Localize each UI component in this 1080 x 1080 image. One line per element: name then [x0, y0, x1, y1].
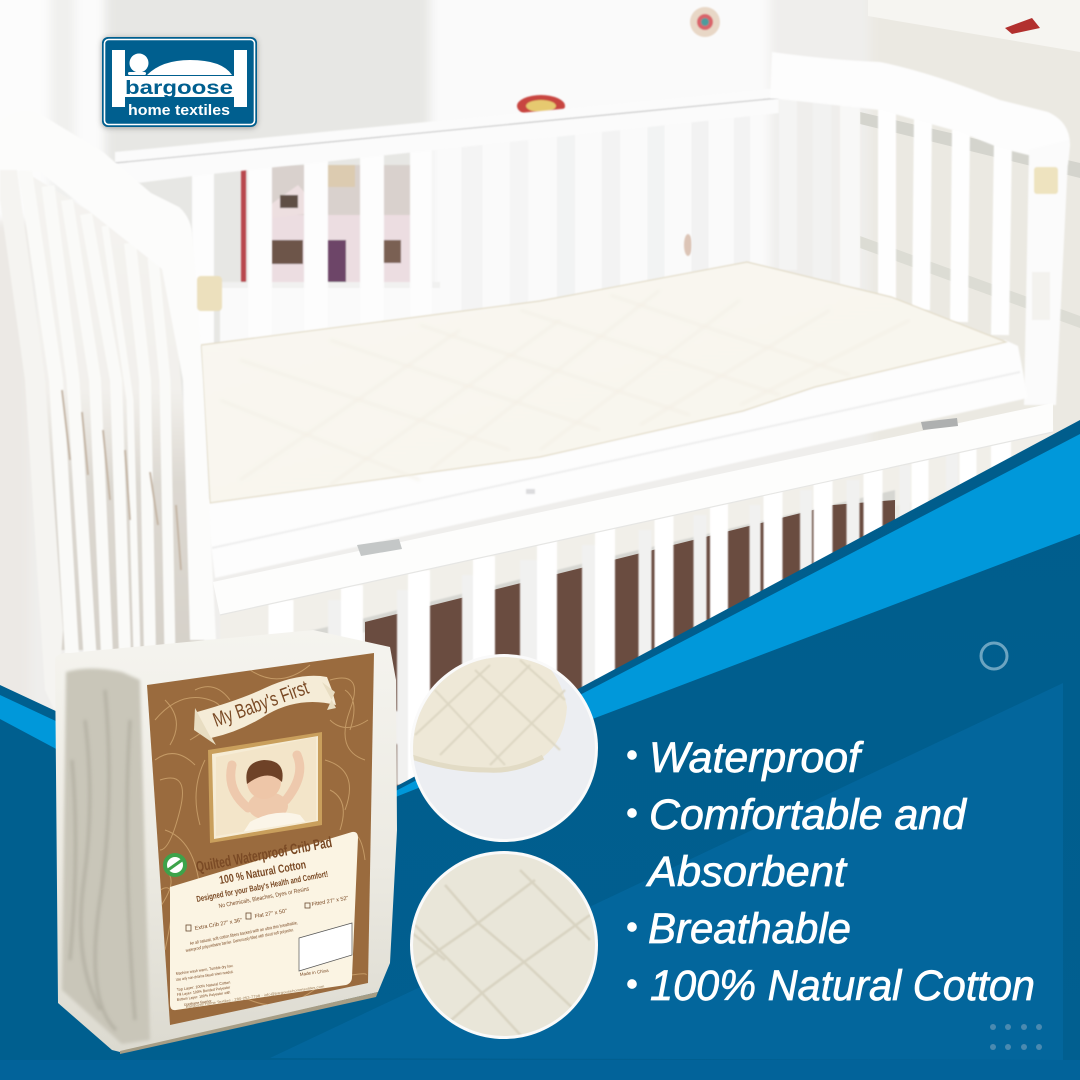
right crib head panel: [770, 52, 1070, 405]
banner: [194, 676, 336, 745]
under-rail back panel: [220, 425, 1053, 668]
information card: [170, 832, 358, 1010]
logo: bargoose home textiles: home textiles: [128, 102, 230, 119]
card text: Fitted 27" x 52": [311, 896, 349, 908]
banner title: My Baby's First: [210, 677, 312, 732]
card text: No Chemicals, Bleaches, Dyes or Resins: [218, 887, 310, 910]
icon: red toy at top right of the crib: [1005, 18, 1040, 34]
card text: Top Layer: 100% Natural Cotton: [177, 981, 231, 992]
blue background shapes: [0, 420, 1080, 1080]
zipper pull: [526, 489, 535, 494]
bullet: Waterproof: Waterproof: [649, 734, 864, 782]
back crib rail and slats: [115, 88, 779, 346]
cabinet strips on the right: [860, 0, 1080, 328]
card text: Machine wash warm. Tumble dry low.: [175, 963, 234, 976]
card text: Extra Crib 27" x 36": [194, 918, 243, 932]
product package: [55, 630, 397, 1054]
crib label sticker: [1032, 272, 1050, 320]
dollhouse behind the crib: [220, 165, 440, 345]
card text: Urethane Barrier: [184, 999, 213, 1007]
wall flower decorations: [517, 7, 720, 256]
quilted pad: [201, 262, 1006, 503]
logo: bargoose home textiles: [102, 37, 257, 128]
card text: Bottom Layer: 100% Polyester with: [177, 991, 231, 1002]
card text: An all natural, soft cotton fibers backed with an ultra thin breathable,: [189, 920, 298, 946]
front crib rail with hinges: [213, 403, 1053, 615]
left crib foot panel: [0, 111, 222, 716]
card text: Quilted Waterproof Crib Pad: [195, 834, 333, 876]
front crib slats: [281, 436, 1001, 785]
green cotton seal: [163, 853, 187, 877]
bullet: Comfortable and Absorbent: Comfortable and: [649, 791, 968, 839]
plastic wrap: [55, 630, 397, 1052]
hinge left: [357, 539, 402, 556]
card text: waterproof polyurethane barrier. Generously filled with cloud soft polyester.: [185, 927, 294, 953]
baby photo frame: [208, 732, 322, 845]
feature bullet list: [628, 734, 1035, 1010]
card text: Fill Layer: 100% Bonded Polyester: [177, 985, 231, 997]
decorative dots: [990, 1024, 1042, 1050]
bullet: Breathable: Breathable: [648, 905, 851, 953]
card text: Bargoose Home Textiles · 280-253-7798 · info@bargoosehometextiles.com: [186, 984, 325, 1009]
card text: 100 % Natural Cotton: [218, 859, 307, 887]
decorative ring: [981, 643, 1007, 669]
icon: sleeping baby: [226, 750, 305, 832]
bullet: Comfortable and Absorbent: [628, 791, 968, 896]
white barcode box: [299, 923, 352, 971]
logo: bargoose home textiles: bargoose: [125, 78, 233, 99]
card text: Use only non-chlorine bleach when needed.: [175, 969, 234, 982]
ornamental swirls: [150, 665, 368, 1010]
brown floor: [365, 500, 895, 800]
hinge right: [921, 418, 958, 430]
detail circle: pad edge: [413, 654, 598, 842]
brown label: [147, 653, 374, 1025]
card text: Designed for your Baby's Health and Comfort!: [195, 869, 329, 904]
size check boxes: [186, 903, 310, 931]
crib side clip: [1034, 167, 1058, 194]
bullet: Comfortable and Absorbent: Absorbent: [645, 848, 848, 896]
left post of the foot panel: [0, 165, 63, 716]
card text: Flat 27" x 50": [254, 908, 288, 920]
detail circle: quilted texture: [410, 851, 598, 1039]
mattress and quilted pad: [201, 262, 1028, 578]
bullet: 100% Natural Cotton: 100% Natural Cotton: [650, 962, 1035, 1010]
card text: [175, 834, 349, 1009]
card text: Made in China: [299, 968, 329, 977]
crib side clip left: [197, 276, 222, 311]
package side: [62, 668, 150, 1044]
